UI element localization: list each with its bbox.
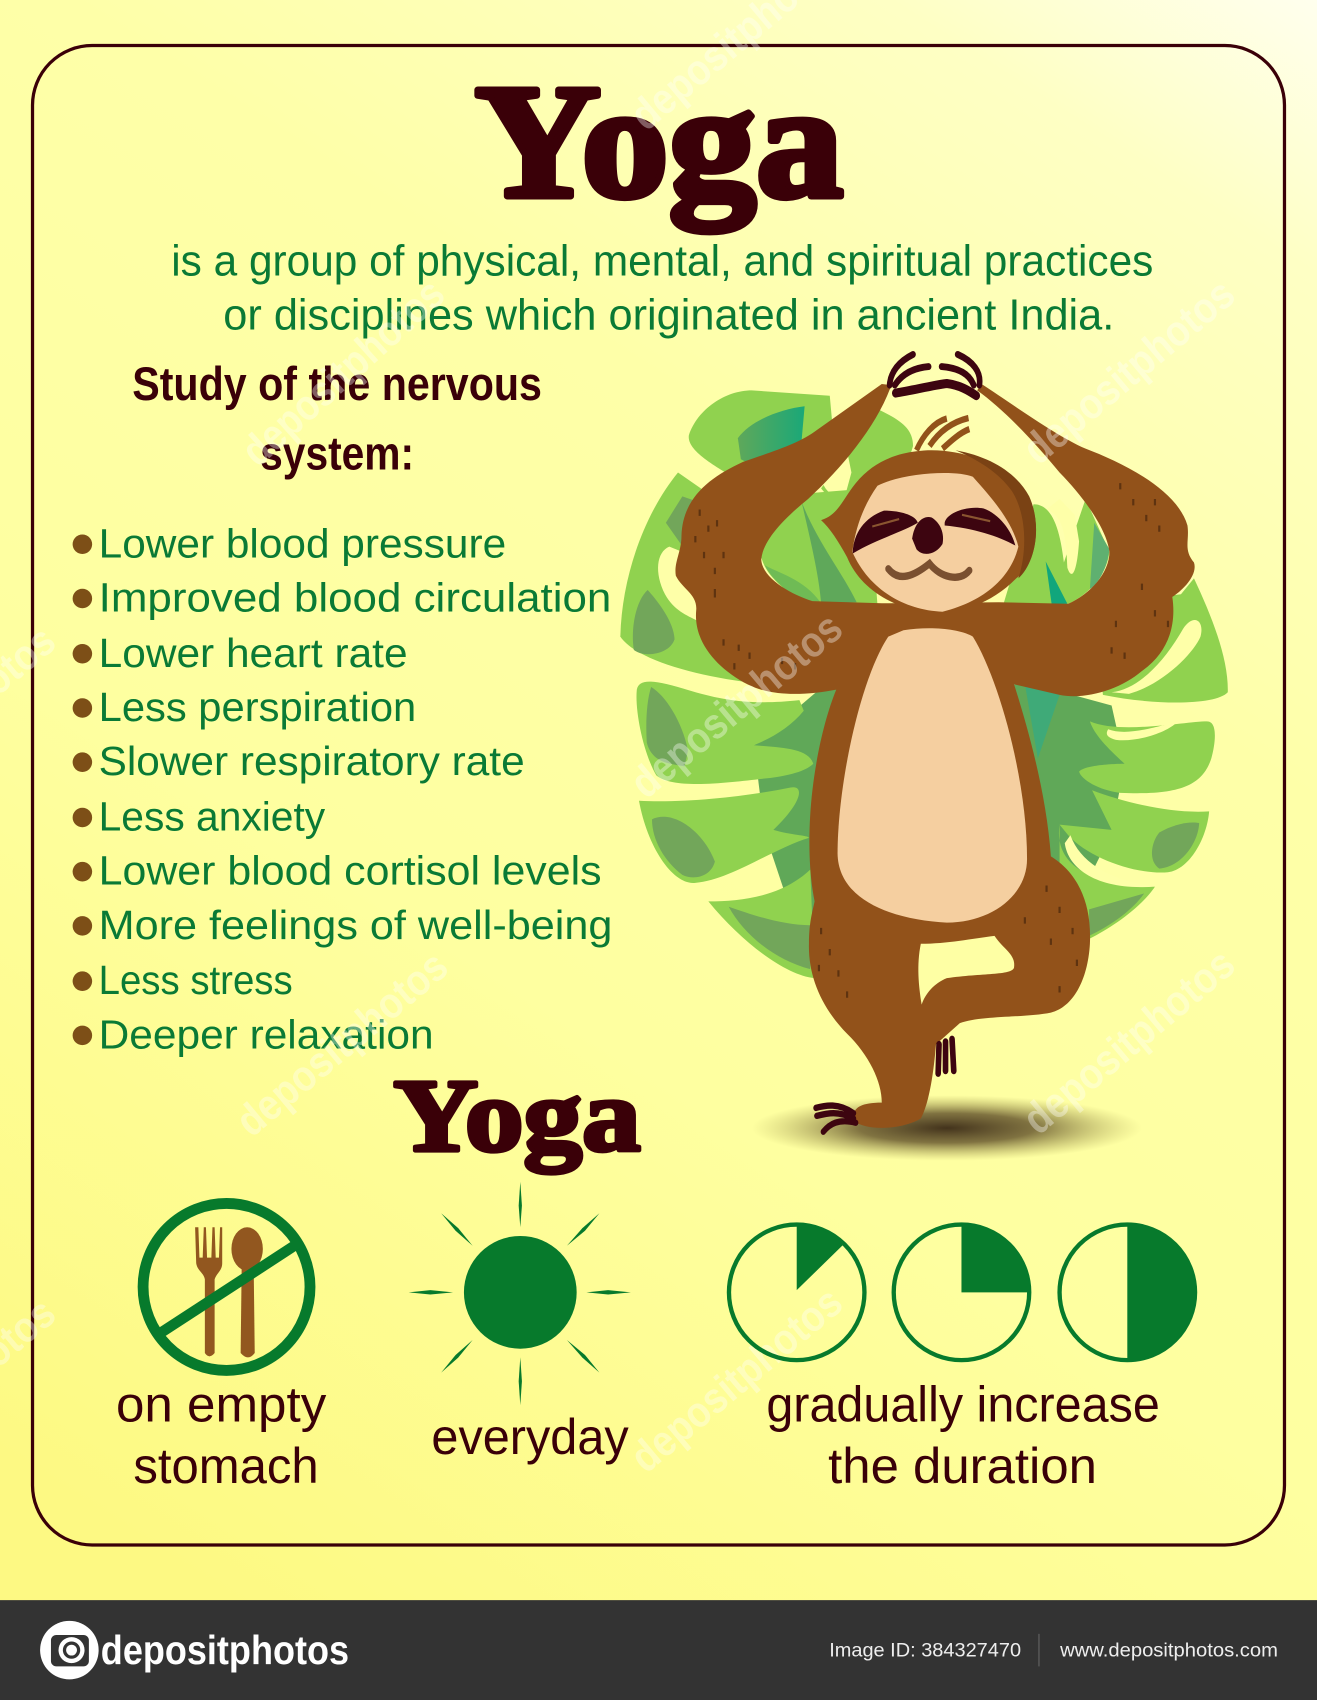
label: on empty stomach <box>116 1376 326 1494</box>
benefits list: Less stress <box>99 957 293 1003</box>
watermarks: depositphotos <box>622 1278 852 1482</box>
watermarks: depositphotos <box>233 270 454 476</box>
watermarks: depositphotos <box>622 604 852 808</box>
benefits list: Deeper relaxation <box>99 1011 434 1057</box>
benefits list: Less anxiety <box>99 793 326 839</box>
footer bar: www.depositphotos.com <box>1059 1640 1278 1662</box>
benefits list: Less perspiration <box>99 684 416 730</box>
footer logo: depositphotos <box>101 1627 349 1673</box>
benefits list: Improved blood circulation <box>99 574 611 620</box>
footer bar: Image ID: 384327470 <box>829 1640 1021 1662</box>
heading: study of the nervous system: Study of the nervous <box>132 358 542 411</box>
icon: duration pies <box>729 1224 1196 1361</box>
label: on empty stomach: on empty <box>116 1376 326 1432</box>
benefits list: Lower blood pressure <box>99 520 506 566</box>
label: on empty stomach: stomach <box>133 1438 319 1494</box>
benefits list <box>73 520 612 1057</box>
shadow <box>752 1095 1142 1161</box>
watermarks: depositphotos <box>1014 270 1244 474</box>
head <box>821 418 1036 613</box>
label: gradually increase the duration: the duration <box>828 1438 1097 1494</box>
watermarks: depositphotos <box>227 942 457 1146</box>
benefits list: More feelings of well-being <box>99 902 612 948</box>
sloth body <box>675 384 1195 1128</box>
belly <box>838 628 1027 923</box>
illustration: sloth on monstera leaf <box>620 354 1228 1161</box>
subheading yoga: Yoga <box>393 1057 641 1173</box>
gap between legs <box>918 936 1014 1005</box>
subtitle <box>171 237 1153 340</box>
icon: no food <box>143 1203 310 1370</box>
fur ticks <box>695 483 1168 998</box>
heading: study of the nervous system <box>132 358 542 480</box>
watermarks: depositphotos <box>1014 940 1244 1144</box>
label: gradually increase the duration: gradually increase <box>766 1376 1160 1432</box>
benefits list: Lower heart rate <box>99 630 408 676</box>
label: gradually increase the duration <box>766 1376 1160 1494</box>
heading: study of the nervous system: system: <box>260 427 414 480</box>
claws <box>816 354 980 1132</box>
subtitle: is a group of physical, mental, and spiritual practices <box>171 237 1153 285</box>
footer bar <box>0 1600 1317 1700</box>
footer logo <box>40 1621 349 1679</box>
subtitle: or disciplines which originated in ancient India. <box>223 292 1114 340</box>
benefits list: Slower respiratory rate <box>99 738 525 784</box>
title: Yoga <box>475 52 843 232</box>
benefits list: Lower blood cortisol levels <box>99 848 602 894</box>
icon: sun <box>409 1182 631 1405</box>
label: everyday: everyday <box>431 1409 629 1465</box>
monstera leaf <box>620 390 1228 978</box>
